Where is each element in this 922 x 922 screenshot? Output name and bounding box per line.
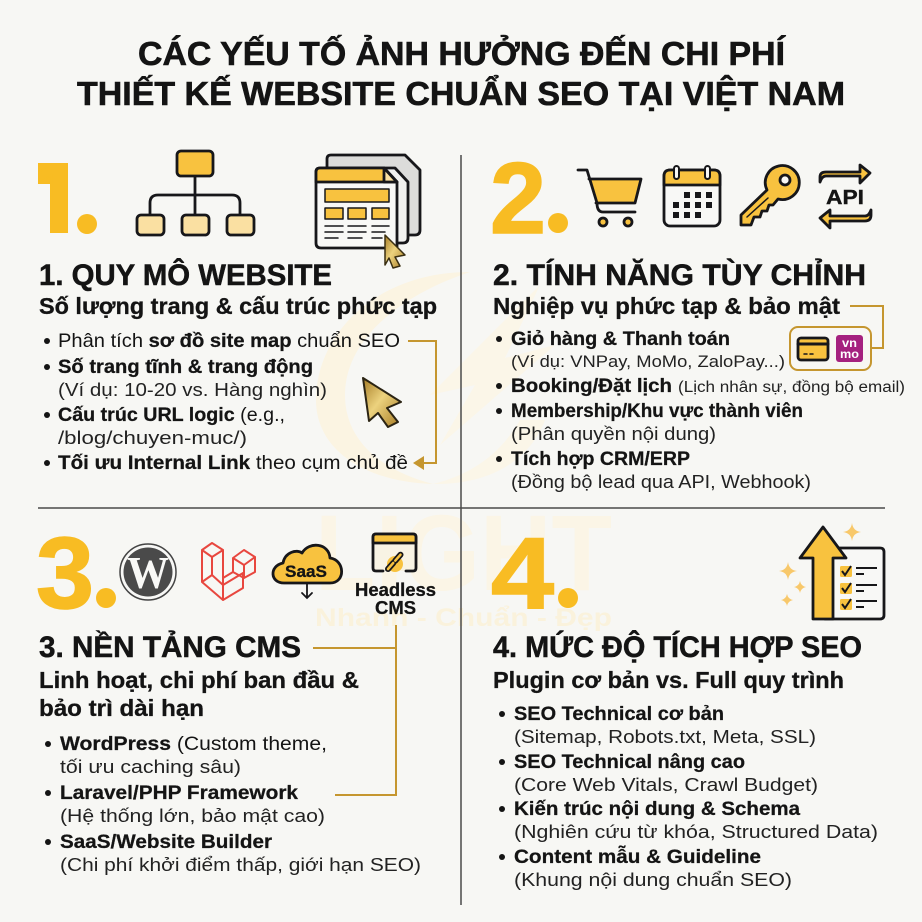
icon: gold cursor bbox=[363, 378, 401, 427]
bullet list: Content mẫu & Guideline bbox=[514, 844, 761, 868]
icon: MoMo: mo bbox=[840, 347, 859, 361]
icon: SEO checklist with arrow bbox=[779, 523, 884, 619]
icon: cart bbox=[578, 170, 641, 226]
bullet list: Booking/Đặt lịch bbox=[511, 375, 672, 397]
bullet list bbox=[496, 328, 905, 492]
icon: Laravel bbox=[202, 543, 255, 600]
icon: key bbox=[741, 166, 799, 225]
callout: payment icons bbox=[790, 327, 871, 370]
arrow: connector bbox=[408, 341, 436, 470]
icon: calendar bbox=[664, 166, 720, 226]
panel: mức độ tích hợp SEO bbox=[491, 518, 884, 890]
panel: quy mô website bbox=[28, 143, 437, 474]
subheading: Số lượng trang & cấu trúc phức tạp bbox=[39, 293, 437, 319]
bullet list: Kiến trúc nội dung & Schema bbox=[514, 798, 800, 820]
bullet list: (Khung nội dung chuẩn SEO) bbox=[514, 869, 792, 890]
bullet list: /blog/chuyen-muc/) bbox=[58, 427, 247, 448]
bullet list bbox=[44, 330, 408, 474]
subheading bbox=[39, 667, 359, 721]
bullet list: Membership/Khu vực thành viên bbox=[511, 400, 803, 422]
bullet list: WordPress (Custom theme, bbox=[60, 733, 327, 755]
bullet list: (Chi phí khởi điểm thấp, giới hạn SEO) bbox=[60, 854, 421, 875]
icon: API arrows: API bbox=[826, 187, 864, 209]
bullet list: (Hệ thống lớn, bảo mật cao) bbox=[60, 805, 325, 826]
title: CÁC YẾU TỐ ẢNH HƯỞNG ĐẾN CHI PHÍ bbox=[138, 34, 786, 72]
bullet list bbox=[45, 733, 421, 875]
number 1: 1 bbox=[28, 143, 84, 255]
bullet list: (Ví dụ: 10-20 vs. Hàng nghìn) bbox=[58, 379, 327, 400]
bullet list: (Đồng bộ lead qua API, Webhook) bbox=[511, 471, 811, 492]
heading: 2. TÍNH NĂNG TÙY CHỈNH bbox=[493, 258, 866, 292]
bullet list bbox=[499, 703, 878, 890]
panel: nền tảng CMS bbox=[36, 518, 436, 875]
number 1 bbox=[38, 163, 97, 234]
number 4: 4 bbox=[491, 518, 554, 630]
icon: headless CMS: Headless bbox=[355, 580, 436, 600]
watermark: LIGHT logo bbox=[315, 272, 612, 632]
arrow: connector bbox=[850, 306, 883, 348]
bullet list: Tích hợp CRM/ERP bbox=[511, 448, 690, 470]
bullet list: Cấu trúc URL logic (e.g., bbox=[58, 404, 285, 426]
bullet list: (Lịch nhân sự, đồng bộ email) bbox=[678, 379, 905, 396]
bullet list: (Sitemap, Robots.txt, Meta, SSL) bbox=[514, 726, 816, 747]
icon: API arrows bbox=[820, 165, 871, 228]
bullet list: (Ví dụ: VNPay, MoMo, ZaloPay...) bbox=[511, 352, 785, 371]
heading: 1. QUY MÔ WEBSITE bbox=[39, 258, 332, 292]
panel: tính năng tùy chỉnh bbox=[490, 143, 905, 492]
title bbox=[77, 34, 845, 112]
bullet list: (Nghiên cứu từ khóa, Structured Data) bbox=[514, 821, 878, 842]
title: THIẾT KẾ WEBSITE CHUẨN SEO TẠI VIỆT NAM bbox=[77, 75, 845, 112]
bullet list: Giỏ hàng & Thanh toán bbox=[511, 328, 730, 350]
bullet list: SEO Technical nâng cao bbox=[514, 751, 745, 773]
number 4 bbox=[491, 518, 578, 630]
heading: 3. NỀN TẢNG CMS bbox=[39, 630, 301, 664]
icon: WordPress: W bbox=[127, 547, 169, 598]
icon: MoMo: vn bbox=[842, 336, 857, 350]
bullet list: (Core Web Vitals, Crawl Budget) bbox=[514, 774, 818, 795]
bullet list: tối ưu caching sâu) bbox=[60, 756, 241, 777]
icon: SaaS cloud bbox=[273, 545, 342, 598]
bullet list: (Phân quyền nội dung) bbox=[511, 423, 716, 444]
icon: SaaS cloud: SaaS bbox=[285, 562, 327, 581]
watermark: LIGHT logo: Nhanh - Chuẩn - Đẹp bbox=[315, 604, 612, 632]
icon: MoMo bbox=[836, 335, 863, 362]
number 2: 2 bbox=[490, 143, 546, 255]
bullet list: Phân tích sơ đồ site map chuẩn SEO bbox=[58, 330, 400, 352]
bullet list: SEO Technical cơ bản bbox=[514, 703, 724, 725]
icon: headless CMS: CMS bbox=[375, 598, 416, 618]
icon: site map bbox=[137, 151, 254, 235]
bullet list: Tối ưu Internal Link theo cụm chủ đề bbox=[58, 452, 408, 474]
subheading: bảo trì dài hạn bbox=[39, 695, 204, 721]
icon: browser pages bbox=[316, 155, 420, 268]
bullet list: Laravel/PHP Framework bbox=[60, 782, 298, 804]
heading: 4. MỨC ĐỘ TÍCH HỢP SEO bbox=[493, 630, 862, 664]
arrow: connector bbox=[313, 625, 396, 795]
number 3: 3 bbox=[36, 518, 94, 630]
bullet list: Số trang tĩnh & trang động bbox=[58, 356, 313, 378]
bullet list: SaaS/Website Builder bbox=[60, 831, 272, 853]
watermark: LIGHT logo: LIGHT bbox=[315, 492, 612, 613]
icon: card bbox=[798, 338, 828, 360]
subheading: Plugin cơ bản vs. Full quy trình bbox=[493, 667, 844, 693]
subheading: Nghiệp vụ phức tạp & bảo mật bbox=[493, 293, 840, 319]
icon: headless CMS bbox=[355, 534, 436, 618]
subheading: Linh hoạt, chi phí ban đầu & bbox=[39, 667, 359, 693]
